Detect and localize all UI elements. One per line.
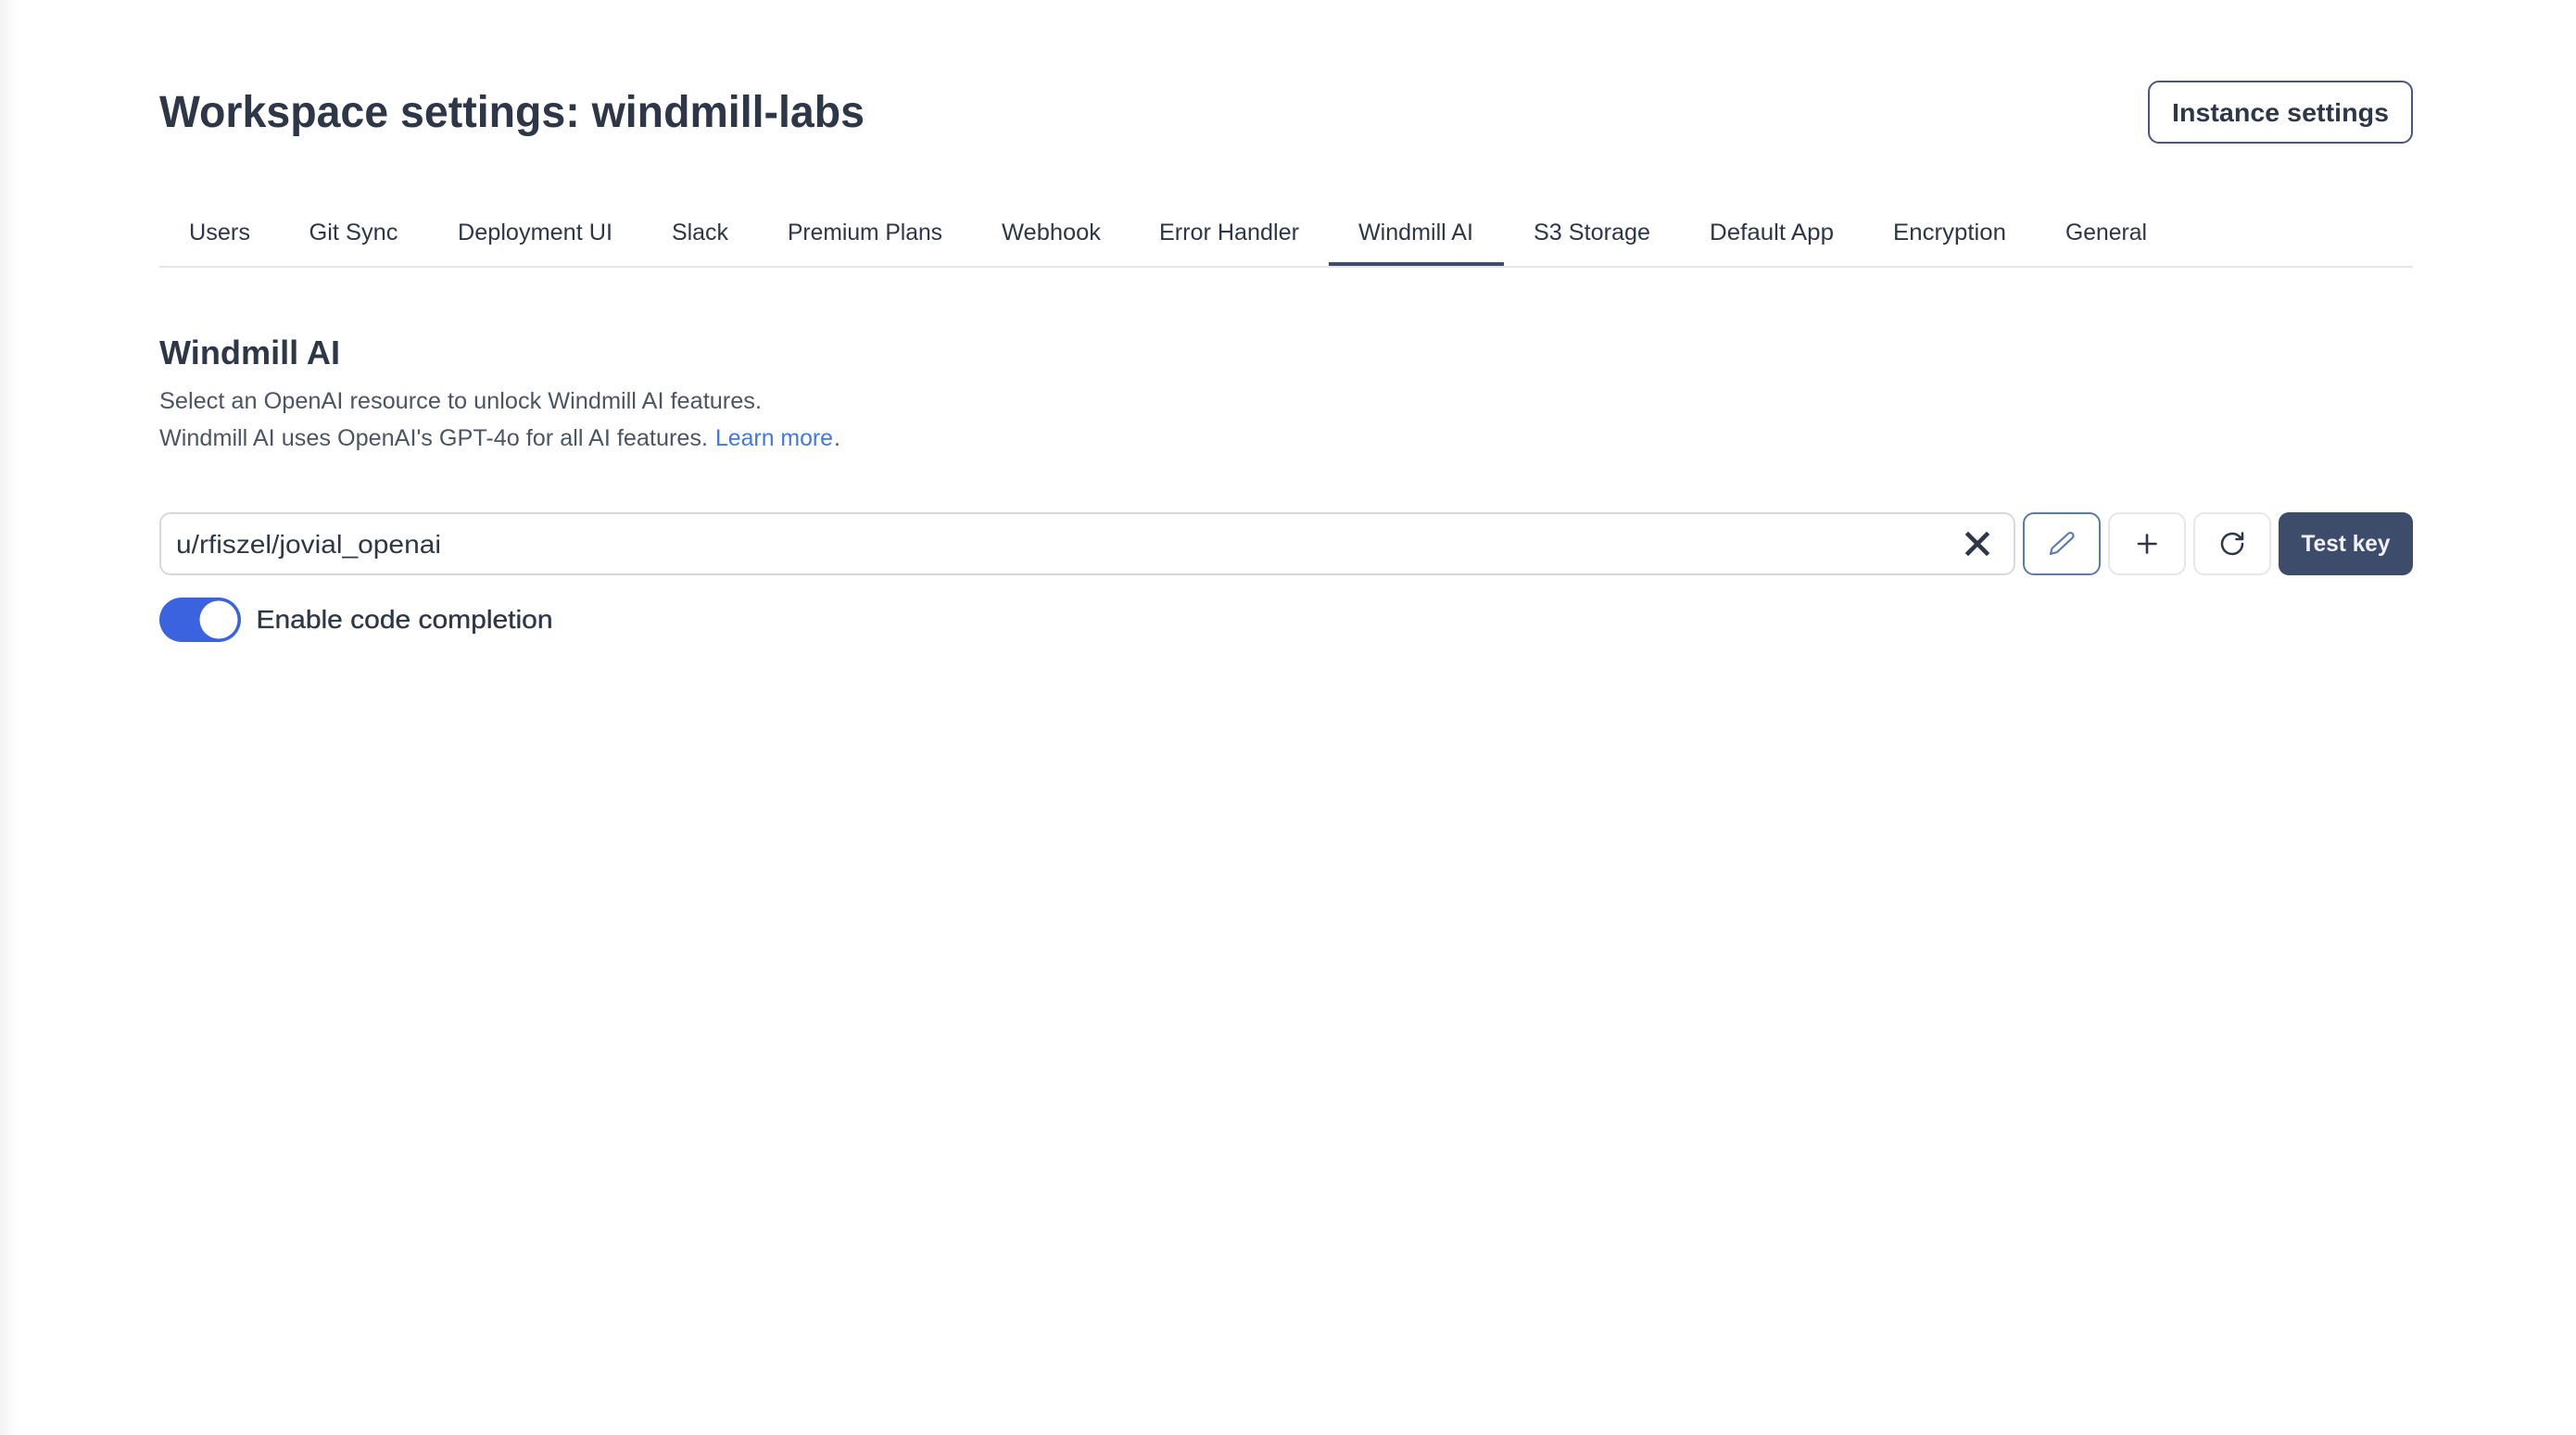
- active tab underline: [1329, 262, 1504, 266]
- icon: refresh: [2222, 534, 2242, 554]
- tab: Default App: Default App: [1710, 220, 1834, 245]
- tab: Encryption: Encryption: [1893, 220, 2006, 245]
- button: test key: Test key: [2302, 531, 2391, 557]
- button: add: [2109, 513, 2185, 574]
- tab: Git Sync: Git Sync: [309, 220, 398, 245]
- section heading: Windmill AI: [159, 334, 340, 371]
- title: Workspace settings: windmill-labs: [159, 88, 865, 137]
- tab: Slack: Slack: [672, 220, 728, 245]
- resource input: [160, 513, 2014, 574]
- icon: clear: [1968, 535, 1987, 553]
- tab: Error Handler: Error Handler: [1159, 220, 1299, 245]
- tab: Users: Users: [189, 220, 250, 245]
- tab bar: [159, 220, 2413, 268]
- button: instance settings: Instance settings: [2172, 98, 2389, 127]
- tab: S3 Storage: S3 Storage: [1534, 220, 1650, 245]
- description text: .: [834, 425, 840, 451]
- toggle: code completion: [159, 598, 241, 642]
- tab: Webhook: Webhook: [1002, 220, 1102, 245]
- description text: Windmill AI uses OpenAI's GPT-4o for all AI features.: [159, 425, 708, 451]
- link: learn more: Learn more: [715, 425, 833, 451]
- description text: Select an OpenAI resource to unlock Windmill AI features.: [159, 388, 762, 414]
- description text: [159, 388, 840, 451]
- button: edit: [2024, 513, 2100, 574]
- tab: Premium Plans: Premium Plans: [788, 220, 942, 245]
- icon: plus: [2139, 535, 2155, 552]
- resource input: u/rfiszel/jovial_openai: [176, 530, 441, 559]
- tab: Windmill AI: Windmill AI: [1358, 220, 1473, 245]
- icon: pencil: [2051, 533, 2074, 554]
- button: test key: [2279, 512, 2413, 575]
- button: instance settings: [2149, 82, 2412, 143]
- tab: General: General: [2065, 220, 2147, 245]
- toggle label: Enable code completion: [256, 605, 552, 634]
- button: refresh: [2194, 513, 2270, 574]
- tab: Deployment UI: Deployment UI: [458, 220, 612, 245]
